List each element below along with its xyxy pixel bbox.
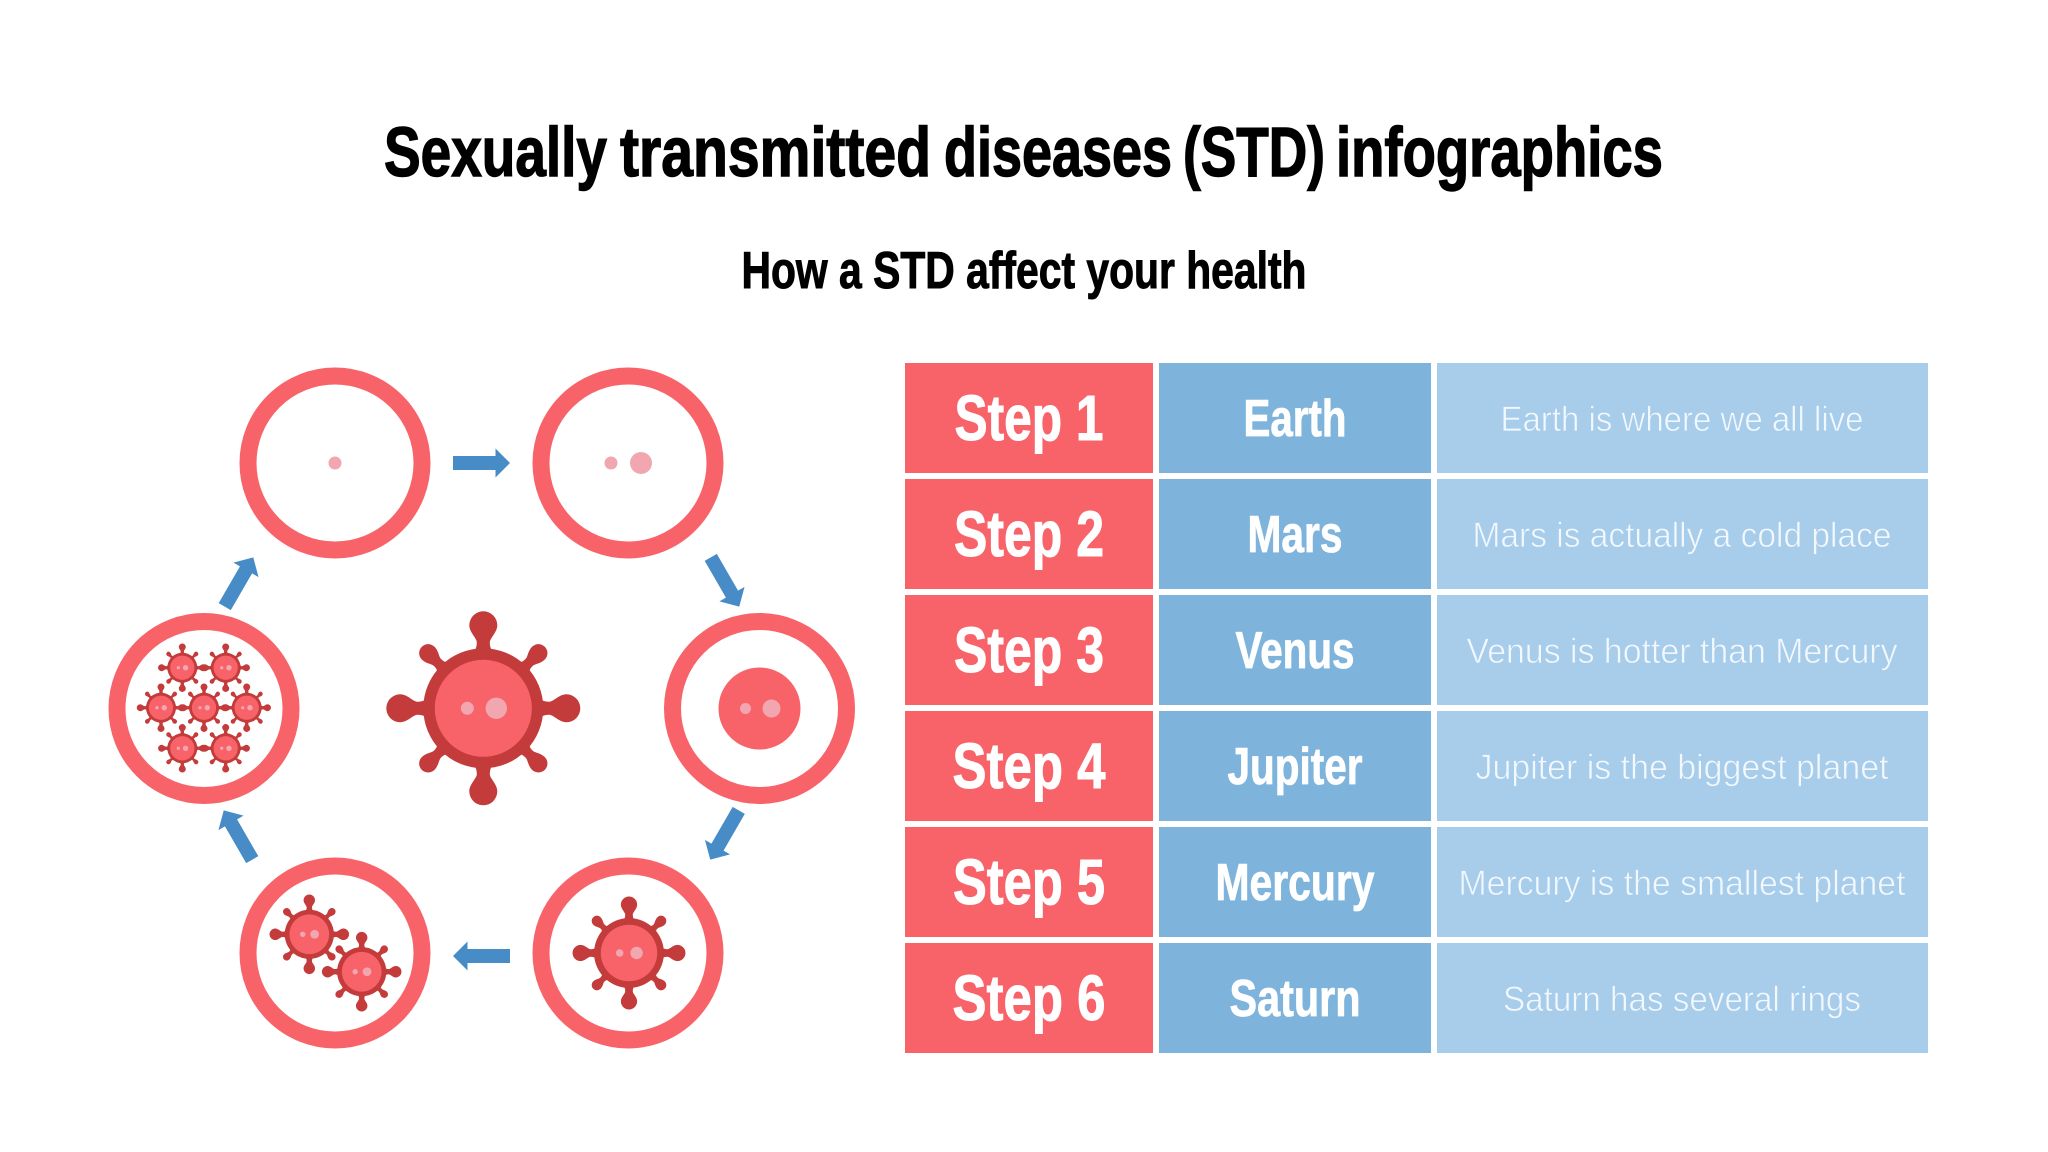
arrow: stage 1 to 2 [453, 448, 510, 478]
arrow: stage 5 to 6 [211, 803, 265, 867]
row: step 1: Earth is where we all live [1500, 400, 1864, 439]
row: step 5: Mercury [1216, 854, 1375, 912]
row: step 5: Step 5 [953, 846, 1105, 918]
title: Sexually [384, 113, 607, 191]
arrow: stage 4 to 5 [453, 942, 510, 970]
row: step 1: Earth [1244, 390, 1346, 448]
row: step 4: Step 4 [952, 730, 1106, 802]
row: step 5: Mercury is the smallest planet [1458, 864, 1906, 903]
stage 5 circle [248, 866, 422, 1040]
row: step 6: Saturn has several rings [1503, 980, 1861, 1019]
row: step 6: Step 6 [952, 962, 1106, 1034]
row: step 3: Venus is hotter than Mercury [1466, 632, 1898, 671]
stage 2 circle [541, 376, 715, 550]
row: step 1: Step 1 [954, 382, 1104, 454]
arrow: stage 6 to 1 [212, 550, 266, 614]
title: (STD) [1183, 113, 1325, 191]
subtitle: How a STD affect your health [742, 242, 1306, 300]
row: step 4 [905, 711, 1928, 821]
table of steps [905, 363, 1928, 1053]
arrow: stage 3 to 4 [698, 803, 751, 867]
row: step 4: Jupiter [1228, 738, 1362, 796]
title: diseases [944, 113, 1172, 191]
row: step 3: Venus [1236, 622, 1354, 680]
stage 6 circle [117, 622, 291, 796]
row: step 6 [905, 943, 1928, 1053]
row: step 2: Mars [1248, 506, 1342, 564]
stage 1 circle [248, 376, 422, 550]
title: infographics [1336, 113, 1663, 191]
row: step 3: Step 3 [954, 614, 1104, 686]
row: step 2: Mars is actually a cold place [1472, 516, 1892, 555]
row: step 2: Step 2 [954, 498, 1104, 570]
stage 3 circle [672, 622, 846, 796]
row: step 4: Jupiter is the biggest planet [1476, 748, 1889, 787]
row: step 1 [905, 363, 1928, 473]
stage 4 circle [541, 866, 715, 1040]
icon: central virus [386, 611, 580, 805]
cycle diagram [117, 376, 846, 1040]
row: step 3 [905, 595, 1928, 705]
title: transmitted [620, 113, 931, 191]
row: step 2 [905, 479, 1928, 589]
row: step 5 [905, 827, 1928, 937]
arrow: stage 2 to 3 [698, 550, 752, 614]
row: step 6: Saturn [1230, 970, 1360, 1028]
